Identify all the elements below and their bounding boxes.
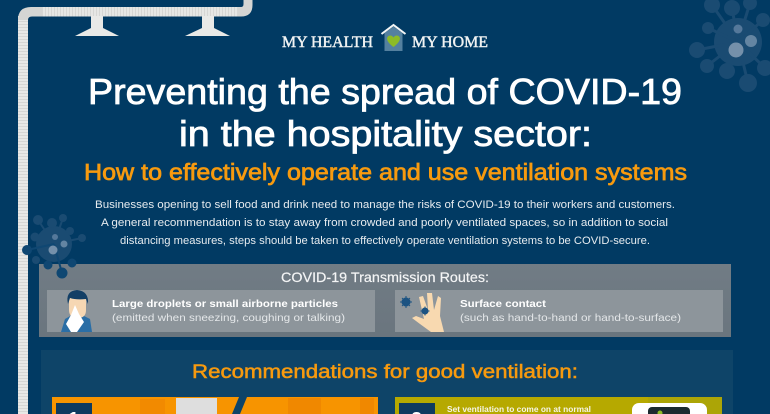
intro text: A general recommendation is to stay away from crowded and poorly ventilated spaces, so in addition to social — [101, 217, 668, 229]
vent: left — [75, 16, 119, 36]
icon: phone on white card — [632, 403, 707, 414]
route: droplets: (emitted when sneezing, coughing or talking) — [112, 312, 345, 324]
subtitle: How to effectively operate and use ventilation systems — [84, 159, 687, 185]
logo: My Health My Home: MY HOME — [412, 34, 488, 51]
card 2 — [395, 397, 722, 414]
vent: right — [185, 16, 230, 36]
title — [88, 71, 682, 154]
number badge 2 — [399, 403, 435, 414]
route: surface: (such as hand-to-hand or hand-to-surface) — [460, 312, 681, 324]
logo: My Health My Home — [282, 25, 488, 51]
icon: virus top right — [689, 0, 770, 92]
route: droplets: Large droplets or small airborne particles — [112, 298, 338, 310]
number badge 1 — [56, 403, 92, 414]
card 2: Set ventilation to come on at normal — [447, 404, 591, 414]
icon: person sneezing — [61, 290, 92, 332]
intro text — [95, 199, 675, 247]
icon: house with heart — [382, 25, 406, 51]
title: in the hospitality sector: — [179, 113, 592, 154]
panel: recommendations — [41, 350, 733, 414]
card 1 — [52, 397, 378, 414]
logo: My Health My Home: MY HEALTH — [282, 34, 373, 51]
intro text: Businesses opening to sell food and drink need to manage the risks of COVID-19 to their workers and customers. — [95, 199, 675, 211]
panel: transmission routes — [39, 264, 731, 337]
ventilation duct with two vents — [18, 0, 252, 414]
icon: virus left — [23, 214, 86, 278]
icon: hand with virus — [400, 293, 444, 332]
route: droplets — [47, 290, 375, 332]
route: surface — [395, 290, 723, 332]
title: Preventing the spread of COVID-19 — [88, 71, 682, 112]
heading: recommendations: Recommendations for good ventilation: — [192, 362, 578, 383]
intro text: distancing measures, steps should be taken to effectively operate ventilation systems to be COVID-secure. — [120, 235, 650, 247]
route: surface: Surface contact — [460, 298, 547, 310]
heading: transmission routes: COVID-19 Transmission Routes: — [281, 269, 489, 285]
